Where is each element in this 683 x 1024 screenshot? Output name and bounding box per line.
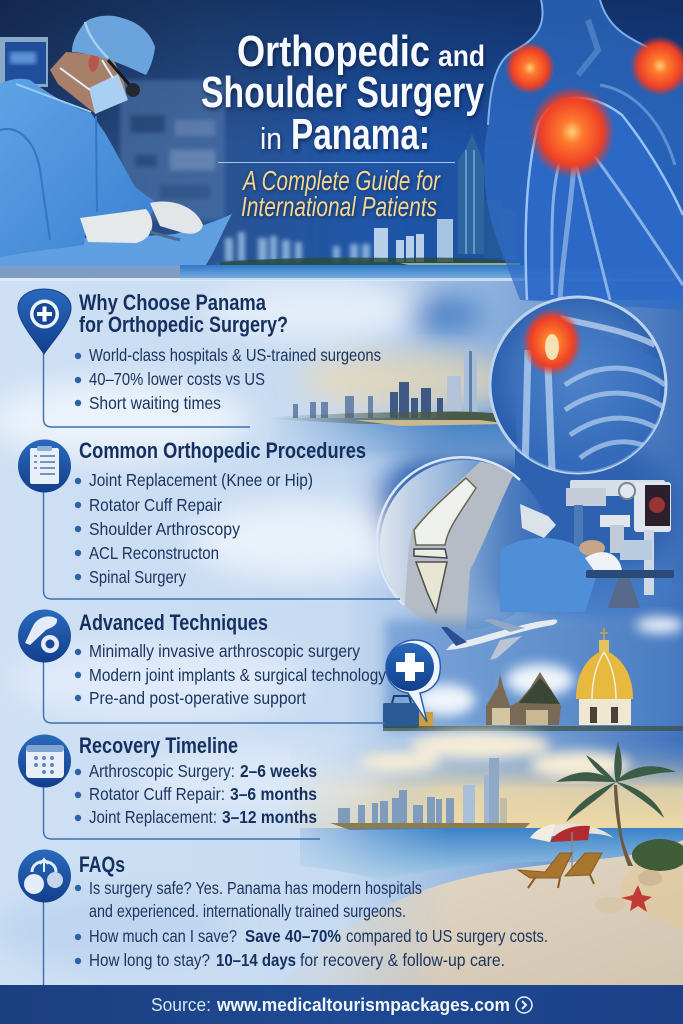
landmark tower (458, 134, 484, 254)
monitor (0, 37, 48, 87)
footer source bar (0, 985, 683, 1024)
icon: location pin with plus (18, 289, 71, 354)
faq list: Is surgery safe? Yes. Panama has modern hospitals (89, 878, 422, 898)
loupes (108, 60, 134, 90)
sun loungers (518, 853, 602, 888)
illustration: shoulder circle (490, 297, 668, 480)
faq list: How much can I save? (89, 926, 237, 946)
illustration: travel and landmarks (383, 617, 683, 731)
bullet list: 3–6 months (230, 784, 317, 804)
icon: arrow circle (516, 997, 532, 1013)
bullet list (75, 470, 313, 587)
connector line (44, 787, 320, 839)
faq list: 10–14 days (216, 950, 296, 970)
connector line (44, 492, 400, 599)
section: FAQs (18, 850, 548, 986)
bullet list: Minimally invasive arthroscopic surgery (89, 641, 360, 661)
gloves (80, 209, 152, 243)
bullet list: 2–6 weeks (240, 761, 317, 781)
heading: for Orthopedic Surgery? (79, 312, 288, 337)
header panel (0, 0, 683, 268)
bullet list: Joint Replacement (Knee or Hip) (89, 470, 313, 490)
dome church (576, 628, 633, 725)
surgical mask (89, 74, 128, 114)
heading: Why Choose Panama (79, 290, 267, 315)
neck and face (50, 52, 126, 114)
faq list: and experienced. internationally trained surgeons. (89, 901, 406, 921)
illustration: translucent shoulder anatomy (484, 0, 683, 310)
section: common procedures (18, 438, 400, 599)
bullet list: Joint Replacement: (89, 807, 217, 827)
bullet list: Spinal Surgery (89, 567, 186, 587)
skyline: header (215, 134, 520, 268)
bullet list: Arthroscopic Surgery: (89, 761, 235, 781)
bullet list: Pre-and post-operative support (89, 688, 306, 708)
title: Shoulder Surgery (201, 68, 484, 117)
title: International Patients (241, 191, 437, 222)
faq list: for recovery & follow-up care. (300, 950, 505, 970)
beach umbrella (530, 824, 614, 872)
surgical cap (72, 16, 155, 75)
drape (0, 214, 232, 266)
speech bubble with cross (386, 640, 440, 722)
bullet list (75, 761, 317, 827)
joint: front shoulder (529, 86, 615, 178)
title: Panama: (291, 110, 430, 159)
section: why choose panama (18, 289, 381, 427)
twin churches (486, 672, 561, 725)
bullet list: Modern joint implants & surgical technology (89, 665, 386, 685)
faq list: compared to US surgery costs. (346, 926, 548, 946)
icon: question headset (18, 850, 71, 902)
heading: FAQs (79, 852, 125, 877)
bullet list: Rotator Cuff Repair: (89, 784, 225, 804)
footer source bar: www.medicaltourismpackages.com (216, 995, 510, 1015)
illustration: operating room robot and patient (500, 480, 680, 618)
title: in (260, 121, 282, 156)
faq list (75, 878, 548, 970)
heading: Recovery Timeline (79, 733, 238, 758)
title: Orthopedic (237, 27, 430, 76)
water band (0, 265, 683, 281)
gown (0, 79, 157, 257)
footer source bar: Source: (151, 995, 211, 1015)
foliage and rocks (595, 839, 683, 913)
heading: Common Orthopedic Procedures (79, 438, 366, 463)
bullet list: 3–12 months (222, 807, 317, 827)
connector line (42, 902, 44, 986)
bullet list: World-class hospitals & US-trained surgeons (89, 345, 381, 365)
suitcases (383, 696, 433, 728)
bullet list: Shoulder Arthroscopy (89, 519, 240, 539)
icon: arthroscopic tool and gear (18, 610, 71, 662)
joint: right shoulder (630, 36, 683, 96)
bullet list: Rotator Cuff Repair (89, 495, 222, 515)
title (201, 27, 485, 222)
sand (280, 840, 683, 985)
bullet list: 40–70% lower costs vs US (89, 369, 265, 389)
heading: Advanced Techniques (79, 610, 268, 635)
section: recovery timeline (18, 733, 320, 839)
connector line (44, 350, 250, 427)
bullet list: ACL Reconstructon (89, 543, 219, 563)
surgeon (0, 16, 232, 266)
illustration: city skyline at sunset (240, 351, 520, 470)
title: A Complete Guide for (242, 165, 441, 196)
bullet list (75, 345, 381, 413)
airplane (441, 619, 557, 660)
bullet list: Short waiting times (89, 393, 221, 413)
icon: calendar (18, 734, 71, 788)
section: advanced techniques (18, 610, 386, 723)
bullet list (75, 641, 386, 708)
heading (79, 290, 288, 337)
illustration: knee circle (377, 457, 550, 640)
joint: left shoulder (505, 42, 555, 94)
icon: clipboard (18, 440, 71, 492)
connector line (44, 662, 385, 723)
title: and (438, 40, 485, 73)
faq list: How long to stay? (89, 950, 210, 970)
starfish (621, 885, 652, 912)
illustration: beach scene (280, 731, 683, 985)
palm tree (556, 742, 676, 866)
faq list: Save 40–70% (245, 926, 341, 946)
